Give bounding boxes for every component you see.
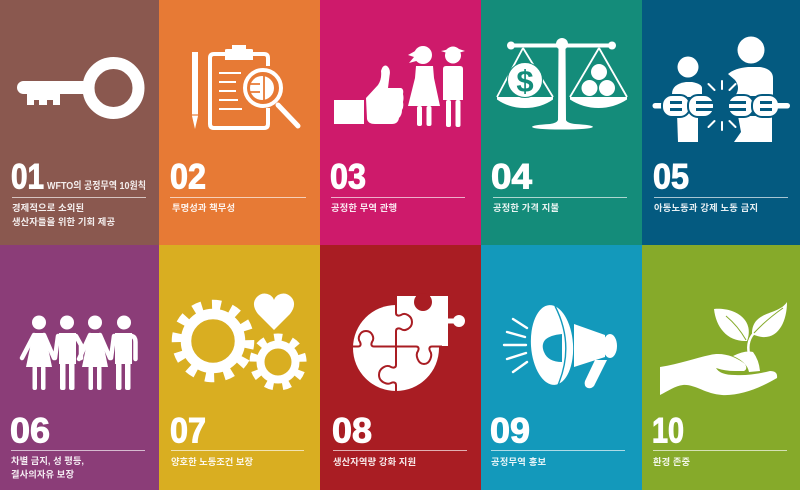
number 07: 07 xyxy=(170,412,206,450)
number 05: 05 xyxy=(653,158,689,196)
icon: two people breaking chains xyxy=(652,36,790,142)
label 06: 결사의자유 보장 xyxy=(11,468,74,480)
panel 04: fair price xyxy=(481,0,642,245)
panel 10: respect for the environment xyxy=(642,245,800,490)
label 06 xyxy=(11,455,84,480)
icon: megaphone xyxy=(504,304,617,388)
panel 01: opportunities xyxy=(0,0,159,245)
panel 02: transparency xyxy=(159,0,320,245)
panel 06: non-discrimination xyxy=(0,245,159,490)
number 08: 08 xyxy=(332,412,372,450)
icon: gears and heart xyxy=(173,294,307,391)
label 08: 생산자역량 강화 지원 xyxy=(333,456,416,467)
label 10: 환경 존중 xyxy=(653,456,690,467)
icon: balance scale with coin and goods xyxy=(497,38,627,130)
number 01: 01 xyxy=(11,158,44,196)
panel 07: good working conditions xyxy=(159,245,320,490)
panel 03: fair trading practices xyxy=(320,0,481,245)
number 06: 06 xyxy=(10,412,50,450)
number 10: 10 xyxy=(652,412,684,450)
icon: hand holding seedling xyxy=(660,302,787,395)
label 05: 아동노동과 강제 노동 금지 xyxy=(654,202,758,213)
icon: balance scale with coin and goods: $ xyxy=(516,64,534,98)
icon: puzzle globe xyxy=(350,293,465,392)
label 09: 공정무역 홍보 xyxy=(491,456,546,467)
icon: four people holding hands xyxy=(22,316,136,390)
icon: thumbs up and two people xyxy=(334,46,465,127)
label 03: 공정한 무역 관행 xyxy=(331,202,397,213)
number 03: 03 xyxy=(330,158,366,196)
label 06: 차별 금지, 성 평등, xyxy=(11,455,84,466)
panel 05: no child or forced labour xyxy=(642,0,800,245)
icon: clipboard and magnifier xyxy=(192,45,298,129)
number 02: 02 xyxy=(170,158,206,196)
label 07: 양호한 노동조건 보장 xyxy=(171,456,253,467)
panel 09: promoting fair trade xyxy=(481,245,642,490)
heading: WFTO 10 principles: WFTO의 공정무역 10원칙 xyxy=(47,179,146,192)
label 01: 경제적으로 소외된 xyxy=(12,202,84,213)
label 01 xyxy=(12,202,115,227)
number 04: 04 xyxy=(491,158,533,196)
label 01: 생산자들을 위한 기회 제공 xyxy=(12,216,115,227)
panel 08: capacity building xyxy=(320,245,481,490)
label 04: 공정한 가격 지불 xyxy=(493,202,559,213)
icon: key xyxy=(17,63,139,113)
label 02: 투명성과 책무성 xyxy=(172,202,235,213)
number 09: 09 xyxy=(490,412,530,450)
